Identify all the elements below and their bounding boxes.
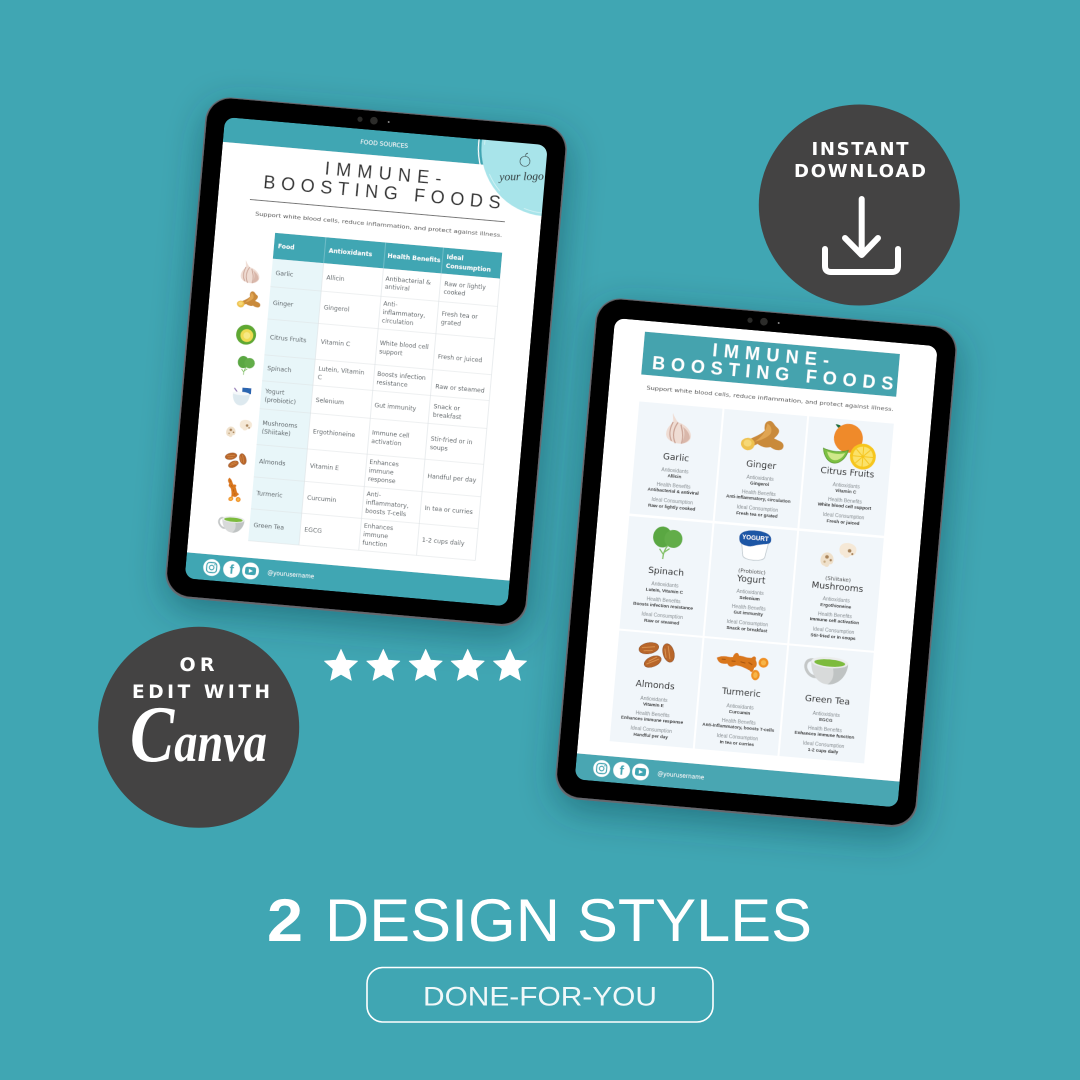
card: almonds: Vitamin E bbox=[643, 701, 664, 708]
done-for-you button: DONE-FOR-YOU bbox=[423, 982, 657, 1012]
page title: IMMUNE- bbox=[324, 158, 442, 189]
table rows: inflammatory, bbox=[366, 499, 409, 510]
table rows: 1-2 cups daily bbox=[422, 537, 465, 548]
card: ginger: Ideal Consumption bbox=[736, 504, 779, 514]
page footer with social icons bbox=[185, 552, 510, 606]
tablet camera bbox=[357, 115, 390, 126]
icon: green tea bbox=[218, 515, 245, 534]
card: turmeric: Ideal Consumption bbox=[716, 733, 759, 743]
table rows: soups bbox=[430, 444, 448, 453]
icon: citrus bbox=[236, 324, 256, 345]
card: turmeric: Health Benefits bbox=[722, 718, 756, 727]
card: yogurt: Selenium bbox=[739, 595, 760, 602]
card: mushrooms: Ideal Consumption bbox=[812, 626, 855, 636]
page title: BOOSTING FOODS bbox=[263, 172, 501, 213]
table rows: Anti- bbox=[383, 301, 398, 309]
title band: BOOSTING FOODS bbox=[651, 353, 894, 394]
badge: instant download: DOWNLOAD bbox=[794, 161, 926, 182]
screen: table page bbox=[186, 118, 547, 606]
card: garlic: Raw or lightly cooked bbox=[648, 503, 696, 512]
table rows: circulation bbox=[382, 317, 414, 327]
table rows: Allicin bbox=[326, 274, 345, 283]
card: turmeric: Turmeric bbox=[720, 687, 761, 700]
table rows: Curcumin bbox=[307, 495, 337, 504]
table rows: Yogurt bbox=[264, 388, 285, 397]
table rows: Spinach bbox=[267, 365, 292, 374]
table rows: antiviral bbox=[384, 284, 410, 293]
card: mushrooms: Immune cell activation bbox=[810, 616, 859, 625]
table rows: Enhances bbox=[364, 523, 394, 532]
card: turmeric: Anti-inflammatory, boosts T-cells bbox=[702, 722, 775, 733]
table rows: Lutein, Vitamin bbox=[318, 366, 365, 377]
card: garlic: Antioxidants bbox=[661, 467, 689, 476]
card: spinach: Antioxidants bbox=[651, 581, 679, 590]
card: green tea: Antioxidants bbox=[812, 711, 841, 719]
card: spinach: Spinach bbox=[648, 566, 684, 579]
card: mushrooms: Stir-fried or in soups bbox=[810, 632, 856, 641]
headline: 2 bbox=[267, 887, 303, 954]
card: ginger bbox=[715, 409, 807, 528]
card: almonds: Health Benefits bbox=[635, 710, 670, 719]
table rows: Gingerol bbox=[323, 304, 350, 314]
table rows: (Shiitake) bbox=[261, 428, 291, 438]
table rows: Stir-fried or in bbox=[430, 436, 473, 446]
table rows: Citrus Fruits bbox=[270, 334, 307, 344]
card: green tea: Health Benefits bbox=[808, 725, 843, 734]
card: citrus fruits: Ideal Consumption bbox=[823, 512, 865, 521]
card: spinach bbox=[619, 516, 712, 636]
card: yogurt: Antioxidants bbox=[736, 589, 764, 597]
table header: Consumption bbox=[446, 263, 491, 274]
card: citrus fruits: Health Benefits bbox=[828, 497, 863, 506]
card: almonds bbox=[610, 631, 702, 748]
table rows: function bbox=[362, 540, 388, 549]
subtitle: Support white blood cells, reduce inflammation, and protect against illness. bbox=[255, 212, 503, 239]
table rows: C bbox=[317, 374, 322, 381]
table rows: activation bbox=[371, 438, 402, 448]
card: mushrooms: Health Benefits bbox=[818, 611, 853, 620]
card: green tea: Green Tea bbox=[805, 694, 850, 708]
table rows: In tea or curries bbox=[424, 505, 473, 516]
badge: or edit with canva: Canva bbox=[130, 691, 267, 779]
food icons column bbox=[218, 260, 261, 533]
card: mushrooms bbox=[789, 531, 884, 651]
card: yogurt: Health Benefits bbox=[732, 604, 766, 613]
card: turmeric: Antioxidants bbox=[726, 703, 754, 712]
card: mushrooms: Ergothioneine bbox=[820, 602, 852, 610]
done-for-you button bbox=[367, 968, 713, 1022]
card: citrus fruits: Citrus Fruits bbox=[820, 466, 875, 481]
table rows: boosts T-cells bbox=[365, 508, 406, 518]
title band bbox=[641, 332, 900, 397]
card: green tea: Ideal Consumption bbox=[803, 740, 845, 750]
card: yogurt: (Probiotic) bbox=[738, 568, 766, 577]
table rows: Turmeric bbox=[255, 490, 283, 499]
icon: turmeric bbox=[228, 478, 241, 502]
table rows: Fresh or juiced bbox=[438, 353, 483, 364]
card: almonds: Antioxidants bbox=[640, 696, 668, 704]
page footer with social icons: @yourusername bbox=[267, 570, 315, 581]
table rows: immune bbox=[363, 531, 389, 540]
food comparison table bbox=[248, 233, 502, 561]
card: spinach: Lutein, Vitamin C bbox=[646, 587, 684, 595]
card: ginger: Anti-inflammatory, circulation bbox=[726, 493, 791, 504]
table rows: support bbox=[379, 348, 403, 357]
table rows: EGCG bbox=[304, 526, 322, 535]
table rows: breakfast bbox=[432, 412, 462, 421]
card: green tea: 1-2 cups daily bbox=[808, 747, 839, 755]
table rows: Ginger bbox=[273, 300, 294, 309]
card: citrus fruits bbox=[799, 416, 894, 536]
table rows bbox=[252, 266, 494, 556]
badge: or edit with canva: OR bbox=[180, 654, 215, 676]
screen: card page bbox=[575, 318, 938, 807]
card: ginger: Antioxidants bbox=[746, 475, 774, 483]
card: citrus fruits: Antioxidants bbox=[832, 482, 861, 491]
table rows: Enhances bbox=[369, 459, 399, 468]
card: ginger: Fresh tea or grated bbox=[736, 510, 778, 519]
page header band: FOOD SOURCES bbox=[360, 139, 409, 150]
table rows: grated bbox=[441, 319, 461, 328]
card: almonds: Almonds bbox=[635, 679, 675, 693]
table rows: Fresh tea or bbox=[441, 311, 479, 321]
table rows: Handful per day bbox=[427, 473, 477, 484]
table rows: Antibacterial & bbox=[385, 276, 431, 287]
badge: instant download: INSTANT bbox=[812, 139, 909, 160]
card: ginger: Ginger bbox=[746, 460, 777, 472]
table rows: Garlic bbox=[275, 270, 293, 279]
logo corner badge bbox=[478, 139, 547, 220]
badge: or edit with canva: EDIT WITH bbox=[132, 682, 270, 703]
tablet bezel bbox=[163, 95, 569, 628]
subtitle: Support white blood cells, reduce inflammation, and protect against illness. bbox=[646, 386, 894, 413]
card: yogurt: Ideal Consumption bbox=[726, 619, 769, 629]
five star rating bbox=[324, 649, 527, 680]
table rows: White blood cell bbox=[380, 340, 429, 351]
card: almonds: Ideal Consumption bbox=[630, 725, 672, 735]
table rows: inflammatory, bbox=[382, 309, 426, 320]
table header: Health Benefits bbox=[387, 253, 441, 264]
page footer with social icons: f bbox=[229, 562, 235, 577]
card: spinach: Raw or steamed bbox=[644, 618, 680, 626]
icon: yogurt bowl bbox=[232, 387, 252, 406]
card: mushrooms: Mushrooms bbox=[811, 581, 864, 595]
table rows: Raw or lightly bbox=[444, 281, 487, 291]
card: turmeric: In tea or curries bbox=[720, 739, 755, 747]
table rows: Vitamin E bbox=[310, 463, 339, 472]
table rows: Selenium bbox=[315, 397, 344, 406]
tablet camera bbox=[747, 316, 780, 327]
table rows: Raw or steamed bbox=[435, 383, 485, 395]
table header: Food bbox=[278, 243, 295, 252]
card: citrus fruits: Vitamin C bbox=[835, 488, 857, 495]
table rows: Mushrooms bbox=[262, 420, 298, 430]
page footer with social icons: @yourusername bbox=[657, 771, 705, 782]
table rows: (probiotic) bbox=[264, 397, 296, 406]
card: mushrooms: (Shiitake) bbox=[825, 576, 851, 584]
card: yogurt bbox=[705, 523, 797, 643]
icon: download arrow bbox=[825, 199, 898, 272]
card: citrus fruits: Fresh or juiced bbox=[826, 518, 860, 526]
page header band bbox=[222, 118, 484, 165]
card: ginger: Gingerol bbox=[750, 480, 769, 487]
table rows: Almonds bbox=[259, 458, 286, 468]
icon: citrus group bbox=[822, 424, 876, 470]
table rows: Green Tea bbox=[253, 522, 285, 532]
badge: instant download bbox=[759, 104, 960, 306]
table header bbox=[278, 244, 491, 272]
icon: almonds bbox=[224, 452, 247, 468]
card: green tea: Enhances immune function bbox=[794, 730, 855, 740]
badge: or edit with canva bbox=[98, 627, 299, 828]
table rows: cooked bbox=[443, 289, 466, 298]
card: yogurt: Gut immunity bbox=[733, 609, 764, 617]
table rows: resistance bbox=[376, 379, 408, 389]
icon: garlic bbox=[240, 260, 260, 284]
card: green tea: EGCG bbox=[819, 717, 833, 723]
card: garlic: Allicin bbox=[667, 473, 682, 479]
table rows: Vitamin C bbox=[320, 339, 350, 348]
table rows: Immune cell bbox=[372, 430, 410, 440]
table header: Ideal bbox=[446, 254, 464, 262]
table rows: Anti- bbox=[366, 491, 381, 499]
tablet bezel bbox=[553, 296, 959, 829]
card: spinach: Boosts infection resistance bbox=[633, 601, 694, 611]
card: spinach: Ideal Consumption bbox=[641, 611, 683, 621]
card: green tea bbox=[779, 645, 874, 763]
table rows: response bbox=[368, 476, 396, 485]
card: turmeric bbox=[695, 638, 787, 756]
table header: Antioxidants bbox=[328, 248, 373, 258]
table rows: Gut immunity bbox=[374, 402, 417, 413]
page footer with social icons bbox=[575, 753, 900, 807]
tablet: table design style bbox=[163, 50, 624, 633]
card: citrus fruits: White blood cell support bbox=[818, 501, 872, 511]
tablet: card design style bbox=[553, 296, 959, 829]
card: spinach: Health Benefits bbox=[646, 596, 681, 605]
page footer with social icons: f bbox=[619, 763, 625, 778]
icon: spinach bbox=[237, 356, 255, 376]
card: yogurt: Snack or breakfast bbox=[726, 625, 768, 634]
card: turmeric: Curcumin bbox=[729, 709, 751, 716]
card: garlic bbox=[630, 401, 723, 521]
card: garlic: Antibacterial & antiviral bbox=[647, 486, 699, 496]
card: garlic: Garlic bbox=[663, 452, 689, 465]
icon: ginger bbox=[236, 291, 261, 308]
table rows: Boosts infection bbox=[377, 371, 426, 382]
card: yogurt: Yogurt bbox=[736, 574, 766, 587]
table rows: immune bbox=[368, 467, 394, 477]
card: ginger: Health Benefits bbox=[742, 489, 776, 498]
table rows: Snack or bbox=[433, 403, 461, 413]
card: garlic: Health Benefits bbox=[656, 482, 691, 491]
table rows: Ergothioneine bbox=[313, 428, 356, 439]
icon: mushrooms bbox=[226, 420, 252, 438]
card: almonds: Enhances immune response bbox=[621, 715, 684, 725]
title band: IMMUNE- bbox=[712, 340, 830, 370]
headline: DESIGN STYLES bbox=[325, 887, 812, 954]
icon: yogurt cup: YOGURT bbox=[742, 534, 769, 543]
logo corner badge: your logo bbox=[498, 171, 544, 183]
card: mushrooms: Antioxidants bbox=[822, 596, 851, 605]
card: almonds: Handful per day bbox=[633, 732, 669, 740]
card: garlic: Ideal Consumption bbox=[651, 497, 693, 507]
